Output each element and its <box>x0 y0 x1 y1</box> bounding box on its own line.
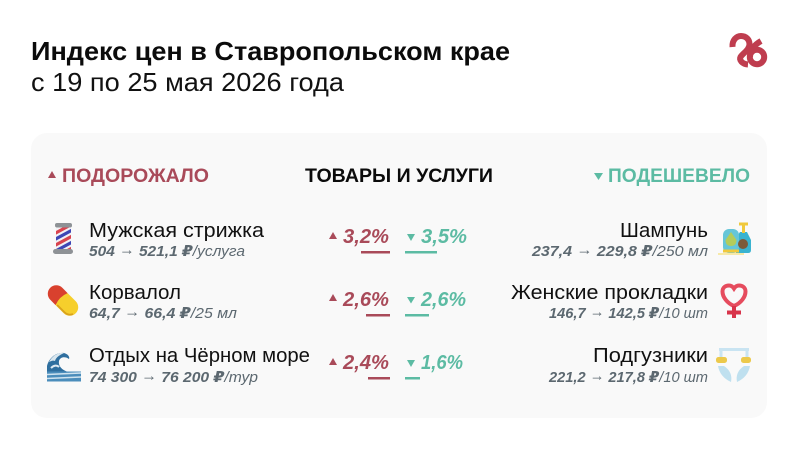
item: Black Sea vacation: Отдых на Чёрном море <box>89 345 310 367</box>
item: corvalol: /25 мл <box>191 305 235 322</box>
item: men's haircut: → <box>119 242 135 258</box>
title: Индекс цен в Ставропольском крае <box>31 36 510 66</box>
change: shampoo down: 3,5% <box>421 226 467 248</box>
item: Black Sea vacation: → <box>141 368 157 384</box>
change: shampoo down <box>405 226 467 254</box>
icon: female heart <box>722 286 746 318</box>
change: pads down: 2,6% <box>420 289 466 311</box>
item: shampoo: → <box>576 242 592 258</box>
item: sanitary pads: 142,5 ₽ <box>604 305 660 322</box>
change: corvalol up: 2,6% <box>342 289 389 311</box>
item: shampoo: Шампунь <box>620 220 708 242</box>
item: Black Sea vacation: /тур <box>224 369 257 386</box>
change: corvalol up <box>329 289 390 316</box>
item: shampoo: /250 мл <box>652 243 705 260</box>
item: diapers: Подгузники <box>593 345 708 367</box>
item: men's haircut: Мужская стрижка <box>89 220 265 242</box>
icon: wave <box>47 353 81 382</box>
change: haircut up: 3,2% <box>343 226 389 248</box>
item: diapers: 217,8 ₽ <box>604 369 660 386</box>
item: corvalol <box>89 282 238 322</box>
item: sanitary pads: Женские прокладки <box>511 282 708 304</box>
logo: 26 <box>732 36 764 64</box>
item: shampoo: 237,4 <box>531 243 576 260</box>
header: went up: ПОДОРОЖАЛО <box>62 166 209 187</box>
icon: diaper <box>716 350 751 382</box>
item: diapers: /10 шт <box>659 369 709 386</box>
item: corvalol: 66,4 ₽ <box>140 305 191 322</box>
item: shampoo: 229,8 ₽ <box>592 243 653 260</box>
item: corvalol: Корвалол <box>89 282 181 304</box>
change: vacation up <box>329 352 390 380</box>
change: diapers down <box>405 352 463 380</box>
item: corvalol: → <box>124 304 140 320</box>
header: goods and services: ТОВАРЫ И УСЛУГИ <box>305 166 493 187</box>
item: sanitary pads: 146,7 <box>549 305 590 322</box>
item: Black Sea vacation <box>89 345 310 386</box>
icon: pill <box>44 282 82 319</box>
item: diapers: 221,2 <box>548 369 590 386</box>
icon: shampoo <box>718 224 751 254</box>
change: diapers down: 1,6% <box>421 352 463 374</box>
icon: barber pole <box>53 223 73 254</box>
item: Black Sea vacation: 76 200 ₽ <box>157 369 225 386</box>
item: sanitary pads: → <box>590 304 604 320</box>
subtitle: с 19 по 25 мая 2026 года <box>31 67 345 97</box>
change: vacation up: 2,4% <box>342 352 389 374</box>
item: sanitary pads <box>511 282 708 322</box>
change: pads down <box>405 289 466 316</box>
item: Black Sea vacation: 74 300 <box>89 369 141 386</box>
panel: price table <box>47 168 751 385</box>
item: corvalol: 64,7 <box>89 305 124 322</box>
item: shampoo <box>531 220 709 260</box>
item: diapers <box>548 345 708 386</box>
item: diapers: → <box>590 368 604 384</box>
item: men's haircut: 504 <box>89 243 119 260</box>
item: men's haircut <box>89 220 265 260</box>
item: men's haircut: /услуга <box>193 243 243 260</box>
item: sanitary pads: /10 шт <box>659 305 709 322</box>
header: went down: ПОДЕШЕВЕЛО <box>608 166 750 187</box>
change: haircut up <box>329 226 390 254</box>
item: men's haircut: 521,1 ₽ <box>135 243 193 260</box>
